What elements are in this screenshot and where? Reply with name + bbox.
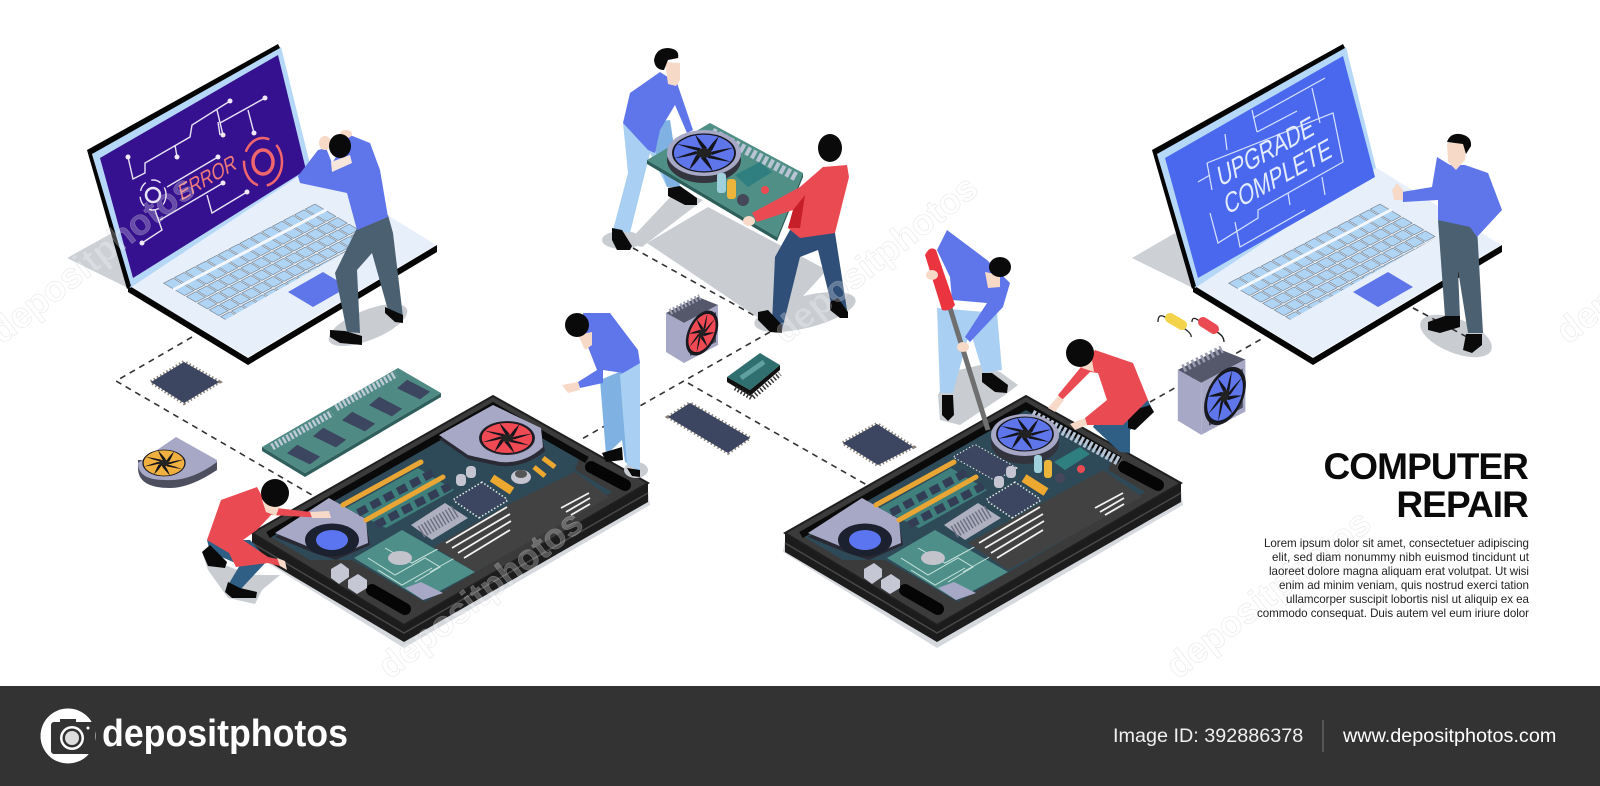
screwdriver xyxy=(950,308,988,430)
watermark text: depositphotos xyxy=(1158,501,1378,686)
circuit lines xyxy=(128,98,265,243)
small components xyxy=(1024,478,1046,492)
title: REPAIR xyxy=(1396,484,1528,525)
screen text: COMPLETE xyxy=(1222,132,1334,222)
large panel xyxy=(434,472,609,572)
square chip centre xyxy=(843,424,913,465)
large panel xyxy=(968,470,1142,570)
top fan xyxy=(991,422,1059,464)
body text: ullamcorper suscipit lobortis nisl ut aliquip ex ea xyxy=(1286,593,1530,606)
screen text: UPGRADE xyxy=(1215,110,1317,194)
capacitors xyxy=(492,478,512,491)
body text: commodo consequat. Duis autem vel eum iriure dolor xyxy=(1257,607,1529,620)
body text: Lorem ipsum dolor sit amet, consectetuer adipiscing xyxy=(1264,537,1529,550)
body text: elit, sed diam nonummy nibh euismod tincidunt ut xyxy=(1272,551,1530,564)
logo wordmark: depositphotos xyxy=(102,713,348,755)
logo icon xyxy=(40,708,96,764)
person: worried man xyxy=(298,130,413,355)
motherboard right xyxy=(783,396,1183,648)
error label: ERROR xyxy=(177,150,239,206)
resistors xyxy=(1158,316,1224,342)
cooler with red fan xyxy=(666,297,725,363)
top fan block xyxy=(439,409,545,466)
image id: Image ID: 392886378 xyxy=(1113,725,1303,747)
long chip xyxy=(668,403,750,453)
title: COMPUTER xyxy=(1323,446,1528,487)
screen: error xyxy=(100,55,306,278)
dashed connector lines xyxy=(116,248,1467,495)
body text xyxy=(1257,537,1530,620)
watermark text: depositphotos xyxy=(370,501,590,686)
long chip on board xyxy=(954,445,1016,480)
panel lines xyxy=(979,493,1124,558)
person: red man crouching right xyxy=(1048,339,1154,453)
graphics card assembly shadow xyxy=(602,190,859,340)
footer bar xyxy=(0,686,1600,786)
person: man thumbs up xyxy=(1392,134,1502,366)
person: blue man pointing xyxy=(562,313,648,478)
laptop: error screen xyxy=(67,44,437,365)
chip: square left xyxy=(151,362,219,403)
circuit frame xyxy=(1198,78,1343,247)
green IC chip xyxy=(727,353,780,398)
person: red man carrying card xyxy=(743,134,849,333)
person: red man crouching left xyxy=(202,479,331,604)
body text: laoreet dolore magna aliquam erat volutpat. Ut wisi xyxy=(1269,565,1529,578)
person: blue man with screwdriver xyxy=(925,230,1018,430)
person: blue man carrying card xyxy=(612,48,697,250)
RAM module xyxy=(262,368,441,477)
square chip xyxy=(987,483,1040,517)
cooler with blue fan xyxy=(1178,349,1254,435)
body text: enim ad minim veniam, quis nostrud exerci tation xyxy=(1279,579,1529,592)
graphics card carried xyxy=(647,123,803,241)
warning target rings xyxy=(244,138,282,186)
panel lines xyxy=(446,493,590,558)
watermark text: depositphotos xyxy=(765,166,985,351)
site url: www.depositphotos.com xyxy=(1342,725,1556,747)
connector teeth xyxy=(1032,414,1120,462)
screen: upgrade complete xyxy=(1165,56,1375,278)
divider xyxy=(1322,720,1324,752)
small orange fan unit xyxy=(138,437,217,488)
square chip xyxy=(454,483,507,517)
laptop: upgrade complete xyxy=(1132,44,1502,365)
title xyxy=(1323,446,1528,525)
motherboard left xyxy=(250,396,650,648)
watermark text xyxy=(0,166,1600,686)
